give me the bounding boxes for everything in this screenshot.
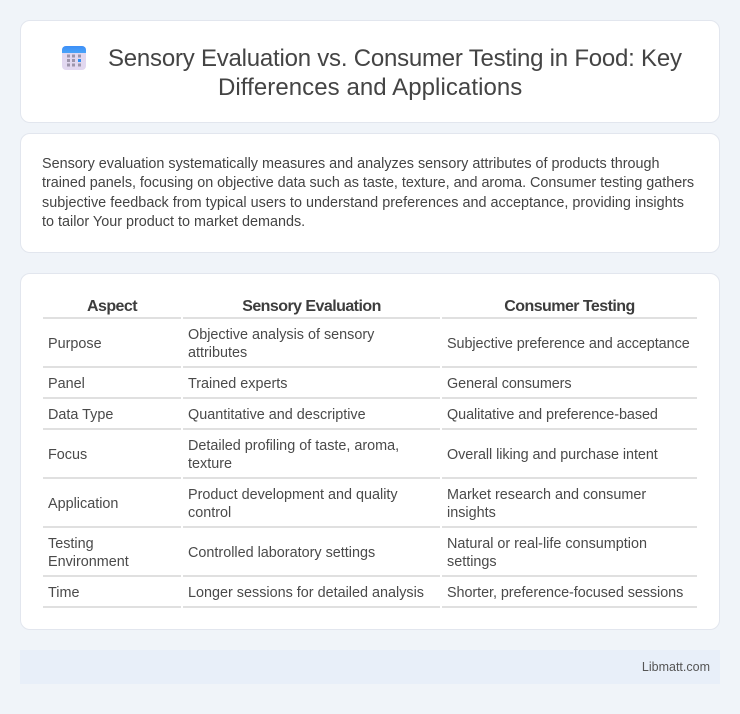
row: time: Longer sessions for detailed analysis — [188, 585, 424, 601]
row: application: Application — [48, 496, 118, 512]
title: Differences and Applications — [218, 74, 522, 101]
icon: calendar — [62, 46, 86, 70]
row: application: Product development and quality — [188, 487, 398, 503]
row: time: Shorter, preference-focused sessions — [447, 585, 683, 601]
row: data type: Quantitative and descriptive — [188, 407, 366, 423]
row: application: insights — [447, 505, 496, 521]
row: panel — [48, 376, 572, 392]
row: testing environment: settings — [447, 554, 497, 570]
comparison table — [43, 298, 697, 608]
header panel — [20, 20, 720, 123]
row: data type — [48, 407, 658, 423]
row: application: Market research and consumer — [447, 487, 646, 503]
title — [108, 45, 682, 101]
intro paragraph: trained panels, focusing on objective data such as taste, texture, and aroma. Consumer testing gathers — [42, 175, 694, 191]
row: purpose: Purpose — [48, 336, 102, 352]
row: time — [48, 585, 683, 601]
row: focus: texture — [188, 456, 232, 472]
footer bar — [20, 650, 720, 684]
intro text panel — [20, 133, 720, 253]
row: panel: General consumers — [447, 376, 572, 392]
row: focus: Detailed profiling of taste, aroma, — [188, 438, 399, 454]
row: focus — [48, 438, 658, 472]
row: focus: Focus — [48, 447, 87, 463]
row: application: control — [188, 505, 231, 521]
header: consumer testing: Consumer Testing — [504, 298, 635, 315]
row: testing environment: Environment — [48, 554, 129, 570]
row: panel: Trained experts — [188, 376, 287, 392]
intro paragraph — [42, 156, 694, 230]
footer credit: Libmatt.com — [642, 660, 710, 674]
intro paragraph: Sensory evaluation systematically measures and analyzes sensory attributes of products through — [42, 156, 660, 172]
title: Sensory Evaluation vs. Consumer Testing in Food: Key — [108, 45, 682, 72]
row: focus: Overall liking and purchase intent — [447, 447, 658, 463]
row: data type: Qualitative and preference-based — [447, 407, 658, 423]
row: testing environment — [48, 536, 647, 570]
row: testing environment: Testing — [48, 536, 94, 552]
row: purpose: attributes — [188, 345, 247, 361]
row: application — [48, 487, 646, 521]
row: panel: Panel — [48, 376, 85, 392]
row: data type: Data Type — [48, 407, 113, 423]
intro paragraph: to tailor Your product to market demands. — [42, 214, 305, 230]
row: testing environment: Controlled laboratory settings — [188, 545, 375, 561]
row: purpose: Objective analysis of sensory — [188, 327, 374, 343]
row: time: Time — [48, 585, 79, 601]
header: sensory evaluation: Sensory Evaluation — [242, 298, 381, 315]
row: purpose: Subjective preference and acceptance — [447, 336, 690, 352]
row: purpose — [48, 327, 690, 361]
row: testing environment: Natural or real-life consumption — [447, 536, 647, 552]
comparison table panel — [20, 273, 720, 630]
intro paragraph: subjective feedback from typical users to understand preferences and acceptance, providing insights — [42, 194, 684, 210]
header: aspect: Aspect — [87, 298, 137, 315]
